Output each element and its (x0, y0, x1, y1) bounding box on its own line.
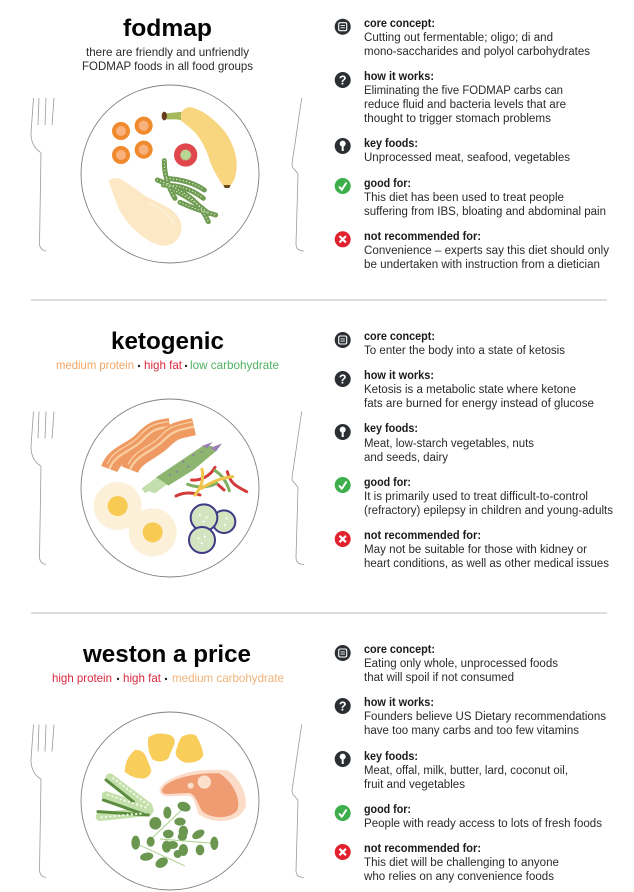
icon: key (335, 751, 351, 767)
icon: check (335, 477, 351, 493)
food: chicken breast (109, 178, 181, 246)
heading: not recommended for: (364, 843, 481, 855)
text block (364, 765, 568, 791)
icon: fork (31, 98, 54, 251)
text block: This diet will be challenging to anyone (364, 857, 559, 869)
subtitle: fodmap: there are friendly and unfriendly (86, 45, 249, 59)
food: banana (162, 107, 237, 188)
row: core concept (335, 331, 565, 357)
text block: reduce fluid and bacteria levels that are (364, 99, 566, 111)
subtitle: macros: medium protein (56, 358, 134, 372)
icon: question mark: ? (339, 700, 347, 714)
text block (364, 438, 534, 464)
icon: fork (31, 412, 54, 564)
row: not recommended for (335, 843, 559, 883)
text block (364, 192, 606, 218)
heading: core concept: (364, 18, 435, 30)
text block: This diet has been used to treat people (364, 192, 564, 204)
row: how it works (335, 697, 606, 737)
food: green beans (157, 161, 216, 222)
text block: Convenience – experts say this diet should only (364, 245, 609, 257)
food: meat (160, 770, 246, 821)
subtitle: macros (56, 358, 279, 372)
icon: knife (292, 724, 304, 878)
icon: cross (335, 531, 351, 547)
icon: knife (292, 98, 304, 251)
icon: cross (335, 231, 351, 247)
icon: question mark: ? (339, 74, 347, 88)
text block: Eliminating the five FODMAP carbs can (364, 85, 563, 97)
heading: how it works: (364, 71, 434, 83)
text block: (refractory) epilepsy in children and young-adults (364, 505, 613, 517)
row: key foods (335, 751, 568, 791)
food: peppers (176, 467, 247, 496)
text block: Ketosis is a metabolic state where ketone (364, 384, 576, 396)
icon: document (335, 19, 351, 35)
panel: fodmap (31, 15, 609, 271)
row: key foods (335, 423, 534, 464)
plate (81, 85, 259, 263)
text block: Unprocessed meat, seafood, vegetables (364, 152, 570, 164)
text block: To enter the body into a state of ketosis (364, 345, 565, 357)
text block: Cutting out fermentable; oligo; di and (364, 32, 553, 44)
text block (364, 544, 609, 570)
food: cucumber slices (189, 504, 235, 553)
icon: question mark (335, 698, 351, 714)
text block: fats are burned for energy instead of glucose (364, 398, 594, 410)
text block: mono-saccharides and polyol carbohydrates (364, 46, 590, 58)
icon: key (335, 138, 351, 154)
text block: and seeds, dairy (364, 452, 448, 464)
row: how it works (335, 71, 566, 125)
row: good for (335, 178, 606, 218)
row: how it works (335, 370, 594, 410)
subtitle: macros: low carbohydrate (190, 358, 279, 372)
text block: who relies on any convenience foods (363, 871, 554, 883)
text block (364, 85, 566, 125)
icon: key (335, 424, 351, 440)
icon: check (335, 805, 351, 821)
text block: have too many carbs and too few vitamins (364, 725, 579, 737)
text block: Founders believe US Dietary recommendations (364, 711, 606, 723)
text block: It is primarily used to treat difficult-to-control (364, 491, 588, 503)
food: green beans (98, 778, 149, 817)
row: core concept (335, 18, 590, 58)
food: weston plate (98, 733, 246, 870)
icon: document (335, 645, 351, 661)
subtitle: macros (52, 671, 284, 685)
text block: be undertaken with instruction from a dietician (364, 259, 600, 271)
title: ketogenic: ketogenic (111, 328, 224, 355)
text block (364, 658, 558, 684)
text block (364, 384, 594, 410)
heading: key foods: (364, 751, 418, 763)
text block (364, 245, 609, 271)
text block: fruit and vegetables (364, 779, 465, 791)
text block (364, 711, 606, 737)
heading: core concept: (364, 644, 435, 656)
subtitle: fodmap: FODMAP foods in all food groups (82, 59, 253, 73)
food: bacon (107, 422, 194, 470)
text block: heart conditions, as well as other medical issues (364, 558, 609, 570)
plate (81, 712, 259, 890)
heading: how it works: (364, 697, 434, 709)
heading: not recommended for: (364, 530, 481, 542)
row: good for (335, 804, 602, 830)
text block (364, 32, 590, 58)
food: carrot slices (114, 119, 151, 162)
row: core concept (335, 644, 558, 684)
food: asparagus (142, 442, 222, 493)
heading: how it works: (364, 370, 434, 382)
icon: question mark: ? (339, 372, 347, 386)
info: ketogenic (335, 331, 613, 570)
info: fodmap (335, 18, 609, 271)
title: weston a price: weston a price (82, 641, 251, 668)
heading: not recommended for: (364, 231, 481, 243)
text block: People with ready access to lots of fresh foods (364, 818, 602, 830)
row: key foods (335, 138, 570, 164)
subtitle: macros: high protein (52, 671, 112, 685)
text block: thought to trigger stomach problems (364, 113, 551, 125)
text block: suffering from IBS, bloating and abdominal pain (364, 206, 606, 218)
food: tomato slice (174, 143, 197, 167)
text block: May not be suitable for those with kidney or (364, 544, 587, 556)
food: fodmap plate (109, 107, 237, 246)
food: potatoes (125, 733, 203, 779)
text block (363, 857, 559, 883)
heading: good for: (364, 477, 411, 489)
food: fried eggs (94, 482, 177, 556)
text block: Eating only whole, unprocessed foods (364, 658, 558, 670)
icon: question mark (335, 371, 351, 387)
subtitle: fodmap (82, 45, 253, 73)
row: not recommended for (335, 231, 609, 271)
text block: Meat, low-starch vegetables, nuts (364, 438, 534, 450)
subtitle: macros: high fat (123, 671, 162, 685)
icon: cross (335, 844, 351, 860)
plate (81, 399, 259, 577)
subtitle: macros: medium carbohydrate (172, 671, 284, 685)
heading: key foods: (364, 423, 418, 435)
food: watercress (131, 800, 218, 870)
text block (364, 491, 613, 517)
row: good for (335, 477, 613, 517)
panel: ketogenic (31, 328, 613, 577)
panel: weston a price (31, 641, 606, 890)
heading: good for: (364, 804, 411, 816)
icon: question mark (335, 72, 351, 88)
icon: document (335, 332, 351, 348)
text block: that will spoil if not consumed (364, 672, 514, 684)
info: weston a price (335, 644, 606, 883)
icon: check (335, 178, 351, 194)
title: fodmap: fodmap (123, 15, 212, 42)
text block: Meat, offal, milk, butter, lard, coconut oil, (364, 765, 568, 777)
subtitle: macros: high fat (144, 358, 183, 372)
icon: fork (31, 724, 54, 878)
food: ketogenic plate (94, 422, 247, 556)
heading: good for: (364, 178, 411, 190)
icon: knife (292, 412, 304, 564)
heading: core concept: (364, 331, 435, 343)
row: not recommended for (335, 530, 609, 570)
heading: key foods: (364, 138, 418, 150)
